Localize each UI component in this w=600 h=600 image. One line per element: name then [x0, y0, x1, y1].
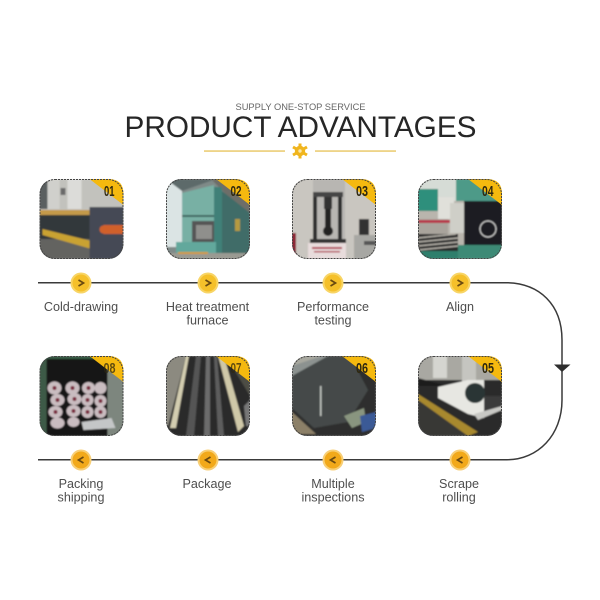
title ornament [204, 144, 396, 158]
step 02 photo: 02 [230, 183, 242, 200]
step 03 label: testing [314, 314, 352, 328]
step 07 photo [166, 356, 250, 436]
step 08 photo [40, 356, 124, 436]
step 03 photo: 03 [356, 183, 368, 200]
step 01 marker [70, 272, 92, 294]
step 03 marker [322, 272, 344, 294]
step 03 photo [292, 179, 376, 259]
step 08 label: shipping [58, 490, 104, 504]
step 04 label: Align [446, 300, 474, 314]
step 06 label: Multiple [311, 477, 355, 491]
step 07 label: Package [182, 477, 232, 491]
step 01 label: Cold-drawing [44, 300, 118, 314]
step 04 marker [450, 272, 470, 294]
title: PRODUCT ADVANTAGES [124, 111, 476, 144]
process path line [38, 283, 562, 460]
step 06 photo: 06 [356, 360, 368, 377]
step 05 label: rolling [442, 490, 476, 504]
step 02 photo [166, 179, 250, 259]
step 02 label: furnace [186, 314, 229, 328]
step 02 label: Heat treatment [166, 300, 250, 314]
step 05 label: Scrape [439, 477, 479, 491]
step 07 marker [198, 450, 218, 470]
step 05 photo: 05 [482, 360, 494, 377]
step 05 marker [450, 450, 470, 470]
step 08 label: Packing [59, 477, 103, 491]
step 06 marker [322, 450, 344, 470]
step 03 label: Performance [297, 300, 369, 314]
step 04 photo [418, 179, 502, 259]
subtitle: SUPPLY ONE-STOP SERVICE [236, 101, 366, 112]
step 05 photo [418, 356, 502, 436]
step 08 marker [70, 450, 92, 470]
arrow: path direction [554, 364, 570, 372]
step 01 photo: 01 [104, 183, 114, 200]
step 02 marker [198, 272, 218, 294]
step 06 photo [292, 356, 376, 436]
step 04 photo: 04 [482, 183, 494, 200]
step 07 photo: 07 [230, 360, 242, 377]
step 01 photo [40, 179, 124, 259]
step 06 label: inspections [301, 490, 365, 504]
step 08 photo: 08 [104, 360, 116, 377]
